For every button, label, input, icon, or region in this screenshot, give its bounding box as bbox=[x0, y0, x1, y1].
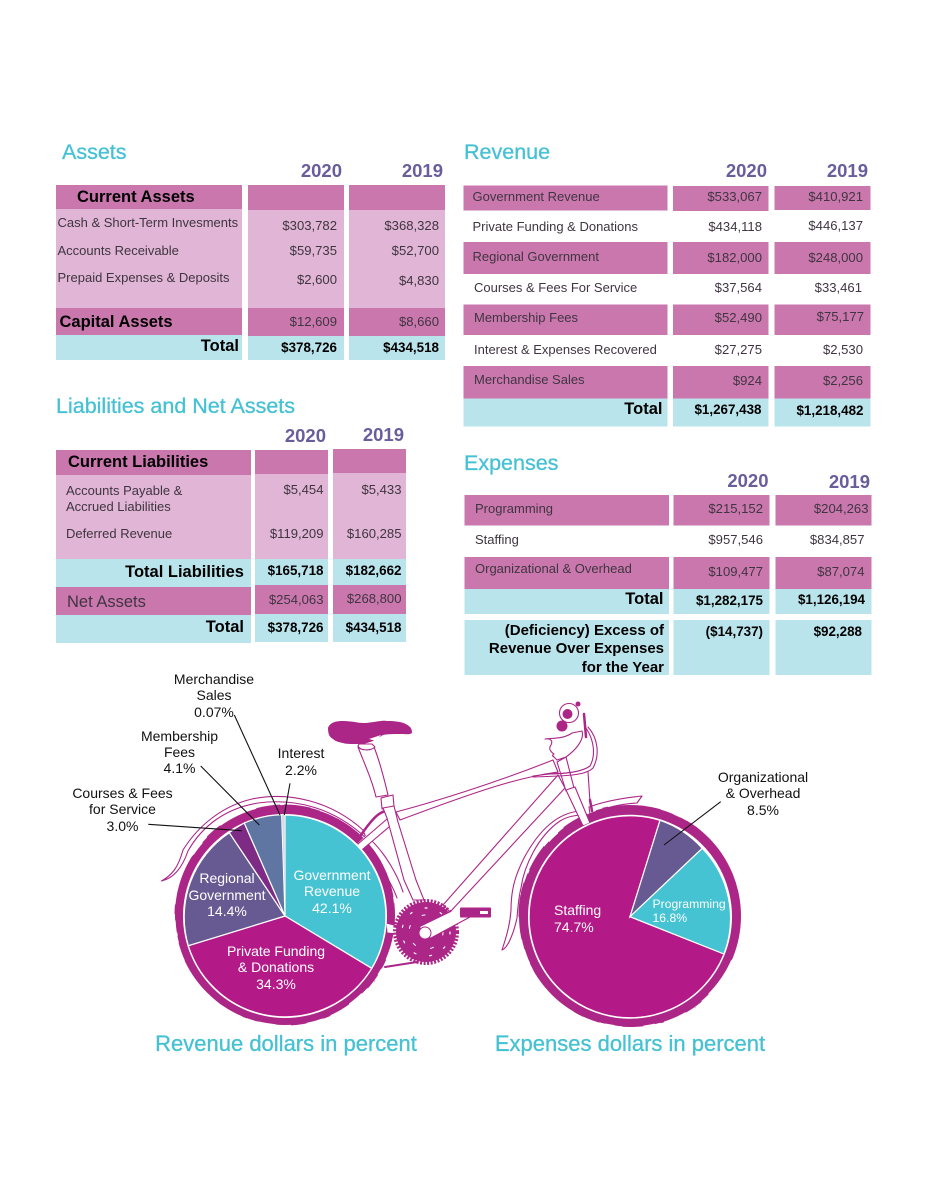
caption: revenue pie: Revenue dollars in percent bbox=[155, 1031, 417, 1056]
panel: revenue bbox=[464, 140, 870, 426]
year labels: expenses: 2019 bbox=[829, 471, 870, 492]
year labels: liabilities: 2020 bbox=[285, 425, 326, 446]
row: deficiency or excess: Revenue Over Expenses bbox=[489, 640, 664, 657]
row: accounts receivable bbox=[58, 243, 439, 258]
table backgrounds: assets bbox=[56, 185, 445, 360]
caption: expenses pie: Expenses dollars in percent bbox=[495, 1031, 765, 1056]
row: total: $1,282,175 bbox=[696, 593, 764, 608]
row: deferred revenue bbox=[66, 526, 402, 541]
row: total: $434,518 bbox=[383, 340, 440, 355]
row: government revenue: Government Revenue bbox=[472, 189, 600, 204]
row: total liabilities: $182,662 bbox=[346, 563, 402, 578]
front fender bbox=[502, 796, 642, 950]
label: regional government: Regional bbox=[199, 870, 255, 886]
label: staffing: 74.7% bbox=[554, 919, 594, 935]
slice: regional government bbox=[184, 833, 285, 946]
callout: merchandise sales bbox=[174, 671, 280, 815]
slice: programming bbox=[630, 848, 731, 954]
year labels: assets: 2020 bbox=[301, 160, 342, 181]
slice: courses and fees bbox=[229, 823, 285, 916]
row: merchandise sales: $924 bbox=[733, 373, 762, 388]
row: total bbox=[624, 400, 864, 418]
slice: membership fees bbox=[244, 815, 285, 916]
row: net assets: $254,063 bbox=[269, 592, 324, 607]
slice: organizational and overhead bbox=[630, 820, 702, 917]
year labels: revenue: 2020 bbox=[726, 160, 767, 181]
callout: merchandise sales: 0.07% bbox=[194, 704, 234, 720]
row: staffing: Staffing bbox=[475, 532, 519, 547]
callout: membership fees: Fees bbox=[164, 744, 195, 760]
row: total bbox=[625, 590, 866, 608]
row: regional government: $248,000 bbox=[808, 250, 863, 265]
table backgrounds: liabilities bbox=[56, 449, 406, 643]
row: total liabilities: $165,718 bbox=[268, 563, 324, 578]
row: courses and fees bbox=[474, 280, 862, 295]
row: regional government: $182,000 bbox=[707, 250, 762, 265]
row: courses and fees: $37,564 bbox=[715, 280, 762, 295]
callout: organizational and overhead: Organizational bbox=[718, 769, 808, 785]
callout: organizational and overhead bbox=[664, 769, 808, 845]
callout: organizational and overhead: 8.5% bbox=[747, 802, 779, 818]
frame tubes bbox=[357, 747, 590, 912]
row: government revenue bbox=[472, 189, 863, 204]
panel: liabilities and net assets bbox=[56, 394, 406, 643]
label: private funding: & Donations bbox=[238, 959, 314, 975]
table backgrounds: expenses bbox=[464, 495, 872, 675]
handlebar bbox=[533, 702, 597, 811]
row: interest and expenses: $27,275 bbox=[715, 342, 762, 357]
row: merchandise sales: Merchandise Sales bbox=[474, 372, 585, 387]
row: net assets: $268,800 bbox=[347, 591, 402, 606]
label: private funding: Private Funding bbox=[227, 943, 325, 959]
bicycle illustration bbox=[162, 702, 741, 1027]
pie outline bbox=[528, 815, 732, 1019]
label: staffing: Staffing bbox=[554, 902, 601, 918]
row: regional government: Regional Government bbox=[472, 249, 599, 264]
callout: interest: Interest bbox=[278, 745, 324, 761]
row: private funding: Private Funding & Donations bbox=[472, 219, 638, 234]
row: membership fees: Membership Fees bbox=[474, 310, 579, 325]
row: total bbox=[206, 618, 402, 636]
label: government revenue: 42.1% bbox=[312, 900, 352, 916]
row: government revenue: $410,921 bbox=[808, 189, 863, 204]
row: capital assets: $8,660 bbox=[399, 314, 439, 329]
row: staffing bbox=[475, 532, 864, 547]
year labels: expenses: 2020 bbox=[727, 470, 768, 491]
row: capital assets: Capital Assets bbox=[60, 313, 173, 331]
revenue pie chart bbox=[72, 671, 387, 1018]
callout: merchandise sales: Sales bbox=[196, 687, 232, 703]
row: cash: Cash & Short-Term Invesments bbox=[58, 215, 239, 230]
row: prepaid expenses: $2,600 bbox=[297, 272, 337, 287]
row: courses and fees: Courses & Fees For Service bbox=[474, 280, 637, 295]
row: total: $1,267,438 bbox=[694, 402, 762, 417]
heading: revenue: Revenue bbox=[464, 140, 550, 164]
slice: private funding bbox=[188, 916, 372, 1017]
row: total: $434,518 bbox=[346, 620, 402, 635]
label: regional government: 14.4% bbox=[207, 903, 247, 919]
row: programming: Programming bbox=[475, 501, 553, 516]
row: deficiency or excess bbox=[489, 622, 863, 676]
slice: interest and merchandise bbox=[282, 814, 285, 916]
panel: expenses bbox=[464, 451, 872, 676]
row: total: Total bbox=[206, 618, 244, 636]
label: programming: Programming bbox=[652, 897, 726, 911]
row: total bbox=[201, 337, 440, 355]
callout: courses and fees: Courses & Fees bbox=[72, 785, 173, 801]
year labels: liabilities: 2019 bbox=[363, 424, 404, 445]
rear wheel rim bbox=[175, 805, 395, 1025]
row: organizational and overhead: $109,477 bbox=[708, 564, 763, 579]
row: private funding bbox=[472, 218, 863, 234]
label: private funding: 34.3% bbox=[256, 976, 296, 992]
row: capital assets: $12,609 bbox=[290, 314, 337, 329]
row: total liabilities bbox=[125, 563, 402, 581]
row: deficiency or excess: $92,288 bbox=[814, 624, 863, 639]
row: total: $378,726 bbox=[268, 620, 324, 635]
heading: expenses: Expenses bbox=[464, 451, 558, 475]
year labels: revenue bbox=[726, 160, 868, 181]
row: prepaid expenses bbox=[58, 270, 439, 288]
label: programming bbox=[652, 897, 726, 925]
row: accounts payable bbox=[66, 482, 402, 514]
row: total liabilities: Total Liabilities bbox=[125, 563, 244, 581]
label: government revenue: Government bbox=[293, 867, 371, 883]
row: total: Total bbox=[625, 590, 664, 608]
row: deferred revenue: Deferred Revenue bbox=[66, 526, 172, 541]
heading: liabilities and net assets: Liabilities and Net Assets bbox=[56, 394, 295, 418]
row: accounts payable: Accounts Payable & bbox=[66, 483, 183, 498]
row: deficiency or excess: ($14,737) bbox=[706, 624, 763, 639]
label: programming: 16.8% bbox=[652, 911, 687, 925]
expenses pie chart bbox=[528, 769, 808, 1019]
rear fender bbox=[162, 796, 403, 898]
callout: merchandise sales: Merchandise bbox=[174, 671, 254, 687]
row: accounts payable: $5,454 bbox=[283, 482, 324, 497]
label: government revenue: Revenue bbox=[304, 883, 360, 899]
callout: membership fees: Membership bbox=[141, 728, 218, 744]
row: total: Total bbox=[201, 337, 239, 355]
row: membership fees bbox=[474, 309, 864, 325]
slice: staffing bbox=[529, 816, 724, 1018]
row: accounts payable: $5,433 bbox=[361, 482, 402, 497]
row: net assets bbox=[67, 591, 402, 611]
row: staffing: $834,857 bbox=[810, 532, 864, 547]
label: government revenue bbox=[293, 867, 371, 916]
year labels: liabilities bbox=[285, 424, 404, 446]
row: programming: $215,152 bbox=[708, 501, 763, 516]
row: membership fees: $52,490 bbox=[715, 310, 762, 325]
callout: membership fees bbox=[141, 728, 259, 825]
slice: government revenue bbox=[285, 815, 386, 968]
row: organizational and overhead bbox=[475, 561, 864, 579]
front wheel rim bbox=[519, 805, 741, 1027]
callout: organizational and overhead: & Overhead bbox=[726, 785, 800, 801]
row: merchandise sales bbox=[474, 372, 863, 388]
year labels: assets bbox=[301, 160, 443, 181]
table backgrounds: revenue bbox=[464, 186, 870, 426]
chain and chainring bbox=[385, 901, 470, 967]
label: private funding bbox=[227, 943, 325, 992]
row: interest and expenses: $2,530 bbox=[823, 342, 863, 357]
label: regional government bbox=[188, 870, 266, 919]
row: current liabilities: Current Liabilities bbox=[68, 453, 208, 471]
pie outline bbox=[183, 814, 387, 1018]
row: accounts payable: Accrued Liabilities bbox=[66, 499, 171, 514]
pedal bbox=[460, 908, 491, 918]
row: programming: $204,263 bbox=[814, 501, 868, 516]
year labels: assets: 2019 bbox=[402, 160, 443, 181]
callout: membership fees: 4.1% bbox=[164, 760, 195, 776]
callout: interest bbox=[278, 745, 324, 815]
callout: courses and fees bbox=[72, 785, 242, 834]
year labels: revenue: 2019 bbox=[827, 160, 868, 181]
callout: courses and fees: for Service bbox=[89, 801, 156, 817]
panel: assets bbox=[56, 140, 445, 360]
row: interest and expenses: Interest & Expenses Recovered bbox=[474, 342, 657, 357]
saddle bbox=[328, 721, 412, 750]
row: total: $1,126,194 bbox=[798, 592, 866, 607]
row: programming bbox=[475, 501, 868, 516]
row: total: Total bbox=[624, 400, 662, 418]
row: cash: $368,328 bbox=[384, 218, 439, 233]
row: accounts receivable: Accounts Receivable bbox=[58, 243, 179, 258]
row: membership fees: $75,177 bbox=[817, 309, 864, 324]
callout: interest: 2.2% bbox=[285, 762, 317, 778]
row: government revenue: $533,067 bbox=[707, 189, 762, 204]
label: staffing bbox=[554, 902, 601, 935]
row: interest and expenses bbox=[474, 342, 863, 357]
row: prepaid expenses: Prepaid Expenses & Deposits bbox=[58, 270, 230, 285]
row: organizational and overhead: $87,074 bbox=[817, 564, 864, 579]
year labels: expenses bbox=[727, 470, 870, 492]
label: regional government: Government bbox=[188, 887, 266, 903]
row: cash bbox=[58, 215, 439, 233]
row: staffing: $957,546 bbox=[708, 532, 763, 547]
heading: assets: Assets bbox=[62, 140, 127, 164]
row: deficiency or excess: for the Year bbox=[582, 659, 664, 676]
row: capital assets bbox=[60, 313, 439, 331]
callout: courses and fees: 3.0% bbox=[107, 818, 138, 834]
row: total: $1,218,482 bbox=[796, 403, 864, 418]
row: organizational and overhead: Organizational & Overhead bbox=[475, 561, 632, 576]
row: courses and fees: $33,461 bbox=[815, 280, 862, 295]
row: accounts receivable: $52,700 bbox=[392, 243, 439, 258]
row: regional government bbox=[472, 249, 863, 265]
row: current assets: Current Assets bbox=[77, 188, 195, 206]
row: cash: $303,782 bbox=[282, 218, 337, 233]
row: deferred revenue: $119,209 bbox=[270, 526, 324, 541]
row: deferred revenue: $160,285 bbox=[347, 526, 402, 541]
row: private funding: $446,137 bbox=[808, 218, 863, 233]
row: prepaid expenses: $4,830 bbox=[399, 273, 439, 288]
row: total: $378,726 bbox=[281, 340, 337, 355]
row: merchandise sales: $2,256 bbox=[823, 373, 863, 388]
row: private funding: $434,118 bbox=[708, 219, 762, 234]
row: net assets: Net Assets bbox=[67, 593, 146, 611]
row: accounts receivable: $59,735 bbox=[290, 243, 337, 258]
row: deficiency or excess: (Deficiency) Excess of bbox=[505, 622, 665, 639]
